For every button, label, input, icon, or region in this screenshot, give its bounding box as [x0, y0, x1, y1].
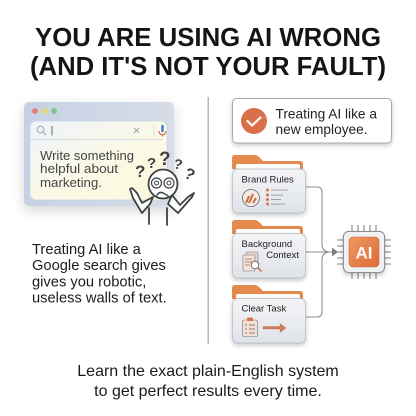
question marks: ?	[147, 155, 156, 172]
question marks: ?	[159, 149, 171, 170]
folder: clear task	[232, 285, 306, 343]
callout: treating AI like a new employee: Treating AI like a	[276, 106, 377, 122]
connector lines	[305, 187, 335, 317]
folder: background context	[232, 220, 306, 278]
folder: brand rules	[232, 155, 306, 213]
question marks: ?	[181, 165, 197, 185]
folder: brand rules: Brand Rules	[242, 174, 294, 186]
question marks: ?	[135, 162, 145, 181]
icon: checklist lines	[266, 188, 288, 206]
left description text: useless walls of text.	[32, 290, 167, 306]
icon: clipboard	[242, 318, 258, 336]
arrow into chip	[332, 248, 338, 256]
browser window illustration	[24, 102, 174, 206]
icon: AI chip: AI	[356, 244, 372, 262]
folder: clear task: Clear Task	[242, 304, 286, 314]
icon: brand chart	[242, 190, 260, 206]
title: YOU ARE USING AI WRONG	[35, 22, 381, 52]
title	[30, 22, 386, 81]
folder: background context: Context	[266, 250, 299, 261]
callout: treating AI like a new employee: new employee.	[276, 122, 368, 137]
handwritten prompt text	[40, 148, 134, 190]
icon: confused stick figure	[130, 149, 197, 225]
icon: check mark	[241, 108, 267, 134]
window control dots	[32, 108, 57, 114]
bottom call to action: Learn the exact plain-English system	[77, 363, 339, 380]
handwritten prompt text: marketing.	[40, 175, 102, 190]
left description text	[32, 242, 167, 306]
question marks: ?	[172, 155, 184, 173]
title: (AND IT'S NOT YOUR FAULT)	[30, 51, 386, 81]
left description text: Google search gives	[32, 258, 166, 274]
question marks	[135, 149, 197, 185]
left description text: gives you robotic,	[32, 274, 146, 290]
bottom call to action	[77, 363, 339, 400]
icon: documents with magnifier	[243, 252, 262, 272]
icon: AI chip	[337, 225, 391, 279]
folder: background context: Background	[242, 239, 292, 250]
handwritten prompt text: Write something	[40, 148, 134, 163]
panel divider	[208, 97, 209, 344]
icon: arrow	[263, 324, 286, 332]
handwritten prompt text: helpful about	[40, 161, 118, 176]
left description text: Treating AI like a	[32, 242, 142, 258]
callout: treating AI like a new employee	[232, 98, 392, 143]
bottom call to action: to get perfect results every time.	[94, 383, 322, 400]
search bar icons	[30, 125, 166, 140]
search card	[30, 121, 167, 200]
